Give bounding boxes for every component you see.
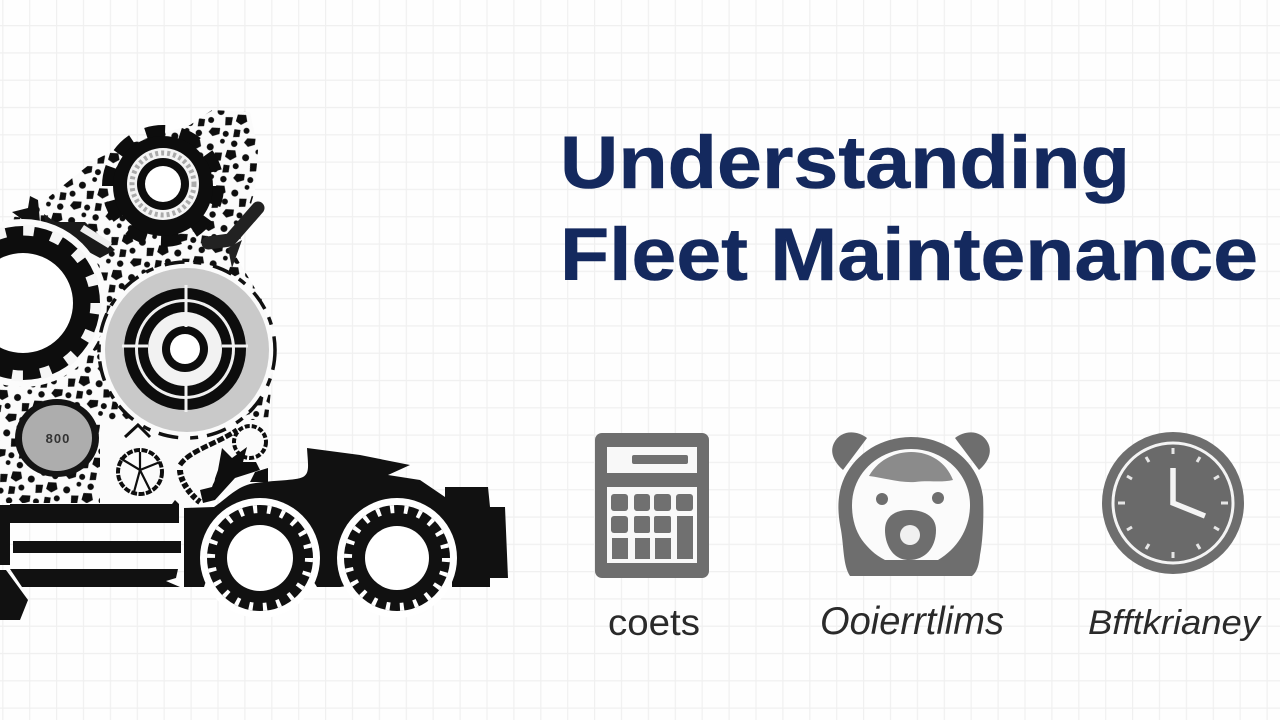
title <box>560 121 1258 296</box>
label: downtime: Ooierrtlims <box>820 600 1004 643</box>
label: costs: coets <box>608 602 700 643</box>
gear: target dial <box>99 262 275 438</box>
truck: rear wheel <box>337 498 457 618</box>
gear: top <box>109 132 217 240</box>
label: efficiency: Bfftkrianey <box>1088 604 1262 642</box>
speckled machinery mass <box>0 110 275 508</box>
lever and bracket <box>12 196 258 268</box>
truck body <box>184 448 508 587</box>
truck: front wheel <box>200 498 320 618</box>
lower small gears <box>118 410 268 503</box>
gauge with number <box>15 399 99 477</box>
gauge with number: 800 <box>46 431 70 446</box>
icon: clock <box>1102 432 1244 574</box>
title: Understanding <box>560 121 1130 204</box>
icon: bear alarm clock <box>832 432 990 576</box>
title: Fleet Maintenance <box>560 213 1258 296</box>
gear: large left <box>0 219 107 387</box>
icon: calculator <box>595 433 709 578</box>
truck: cargo stripes <box>0 500 181 620</box>
illustration: gears and truck <box>0 110 508 620</box>
